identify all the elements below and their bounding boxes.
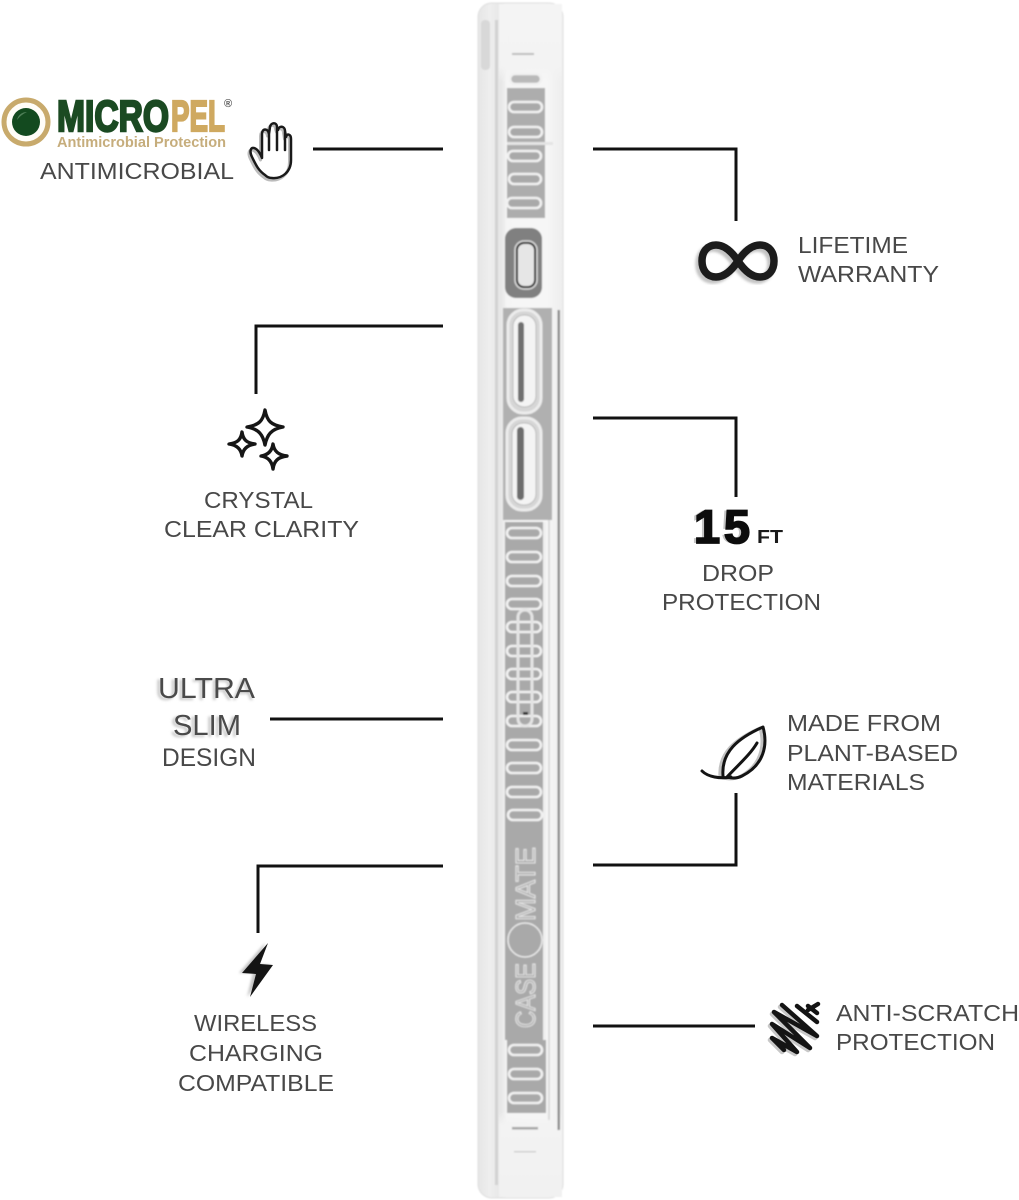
label: plant-based materials: PLANT-BASED [787,740,958,766]
label: crystal clear clarity: CRYSTAL [204,487,313,513]
bottom end cap [499,1112,562,1197]
camera speck [523,712,528,715]
shadow: ultra slim [155,674,253,744]
icon: leaf [702,727,765,779]
shadow: ultra slim: SLIM [170,711,238,744]
bottom slots [509,1045,542,1152]
number shadow: 15 [691,500,747,553]
icon: sparkles [229,410,287,469]
logo highlight [17,112,27,120]
middle slots [507,528,542,820]
label: anti-scratch protection: ANTI-SCRATCH [836,1000,1019,1026]
connector: wireless charging [258,866,443,933]
label: wireless charging compatible: COMPATIBLE [178,1070,334,1096]
number: 15 [694,500,750,553]
top band highlight [507,142,553,145]
engraved word: mate: MATE [510,847,541,921]
switch cutout [505,228,542,298]
label: plant-based materials: MATERIALS [787,769,925,795]
label: crystal clear clarity [164,487,359,542]
top slots [507,53,542,208]
lower rail [543,522,546,1112]
phone case side view [478,3,563,1198]
label: anti-scratch protection: PROTECTION [836,1029,995,1055]
label: wireless charging compatible: CHARGING [189,1040,323,1066]
connector: anti-scratch [593,1024,755,1028]
text: design: DESIGN [162,744,256,772]
label: wireless charging compatible: WIRELESS [194,1010,317,1036]
micropel logo [4,92,232,151]
connector: crystal clear [256,326,443,394]
center cross pill [518,610,532,726]
text: slim: SLIM [173,710,241,742]
text: ultra: ULTRA [158,673,256,705]
top end cap [499,4,562,82]
top left corner shade [481,20,490,70]
registered mark: ® [224,98,232,110]
label: drop protection: PROTECTION [662,589,821,615]
right dark edge [558,310,560,1130]
case body [478,3,563,1198]
inner edge line [495,20,498,1185]
wordmark gold: PEL [171,92,225,141]
drop height figure [691,500,783,553]
shadow: ultra slim: ULTRA [155,674,253,707]
label: lifetime warranty [798,232,939,287]
right inner rail [548,520,550,1120]
label: ultra slim design [155,673,256,772]
label: wireless charging compatible [178,1010,334,1096]
label: lifetime warranty: WARRANTY [798,261,939,287]
label: crystal clear clarity: CLEAR CLARITY [164,516,359,542]
logo ring [4,100,48,144]
icon: lightning bolt [239,943,273,997]
bottom gray strip [507,1040,546,1113]
lower gray strip [505,522,543,1040]
volume button area [503,308,552,520]
connector: ultra slim [270,718,443,720]
logo ball [12,108,40,136]
logo circle [508,923,542,957]
label: drop protection [662,560,821,615]
icon: scratch scribble [770,1004,818,1054]
label: lifetime warranty: LIFETIME [798,232,908,258]
connector: lifetime warranty [593,149,736,221]
label: anti-scratch protection [836,1000,1019,1055]
connector: antimicrobial [313,148,443,150]
connector: drop protection [593,418,736,497]
engraved word: case: CASE [510,963,541,1028]
wordmark green: MICRO [57,92,169,141]
top gray strip [507,88,545,218]
icon: infinity [699,245,774,280]
tagline: Antimicrobial Protection [57,134,226,151]
brand engraving [508,847,542,1028]
label: plant-based materials [787,710,958,795]
label: antimicrobial: ANTIMICROBIAL [40,158,234,184]
unit: FT [757,527,783,547]
label: plant-based materials: MADE FROM [787,710,941,736]
connector: plant-based [593,793,736,865]
label: drop protection: DROP [702,560,774,586]
icon: hand [249,123,291,180]
